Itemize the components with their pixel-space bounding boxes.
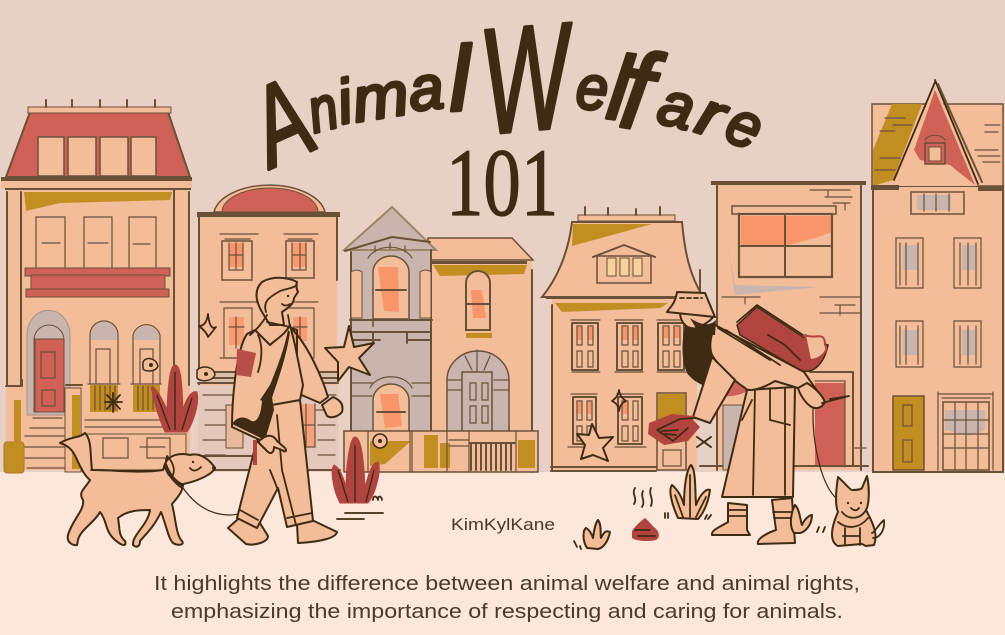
building 3: grey tower house (344, 207, 538, 472)
title: Animal Welfare 101: f (613, 28, 671, 155)
title: Animal Welfare 101 (227, 0, 773, 236)
caption text: It highlights the difference between animal welfare and animal rights, (154, 572, 860, 595)
title: Animal Welfare 101: n (301, 73, 345, 147)
plant: red centre (332, 437, 383, 519)
title: Animal Welfare 101: r (689, 78, 737, 153)
building 4: yellow-roof mansard house (542, 207, 703, 471)
title: Animal Welfare 101: e (717, 86, 773, 163)
building 5: brick house with large window (700, 181, 868, 470)
woman scooping with backpack (648, 292, 849, 544)
title: Animal Welfare 101: l (603, 37, 638, 141)
building 2: domed townhouse (197, 185, 340, 470)
plant: small near woman (791, 505, 825, 533)
poop with steam (632, 488, 659, 541)
dog on a leash (60, 433, 254, 547)
author credit: KimKylKane (451, 516, 555, 534)
plant: tan near poop (665, 465, 711, 519)
title: Animal Welfare 101: A (227, 54, 331, 192)
title: Animal Welfare 101: i (331, 67, 361, 138)
title: Animal Welfare 101: a (405, 53, 447, 125)
title: Animal Welfare 101: e (574, 52, 611, 124)
building 6: gabled townhouse (871, 80, 1003, 472)
building 1: mansard townhouse (1, 100, 192, 473)
cat sitting (832, 476, 884, 546)
plant: red left (151, 365, 198, 432)
man walking the dog (228, 278, 343, 545)
plant: small bottom (574, 520, 610, 549)
title: Animal Welfare 101: m (347, 58, 413, 135)
title: Animal Welfare 101: 101 (446, 129, 558, 236)
caption text (154, 572, 860, 623)
title: Animal Welfare 101: a (652, 69, 702, 144)
caption text: emphasizing the importance of respecting and caring for animals. (171, 600, 843, 623)
decorative sparkles and flowers (143, 314, 711, 461)
title: Animal Welfare 101: l (446, 27, 476, 131)
